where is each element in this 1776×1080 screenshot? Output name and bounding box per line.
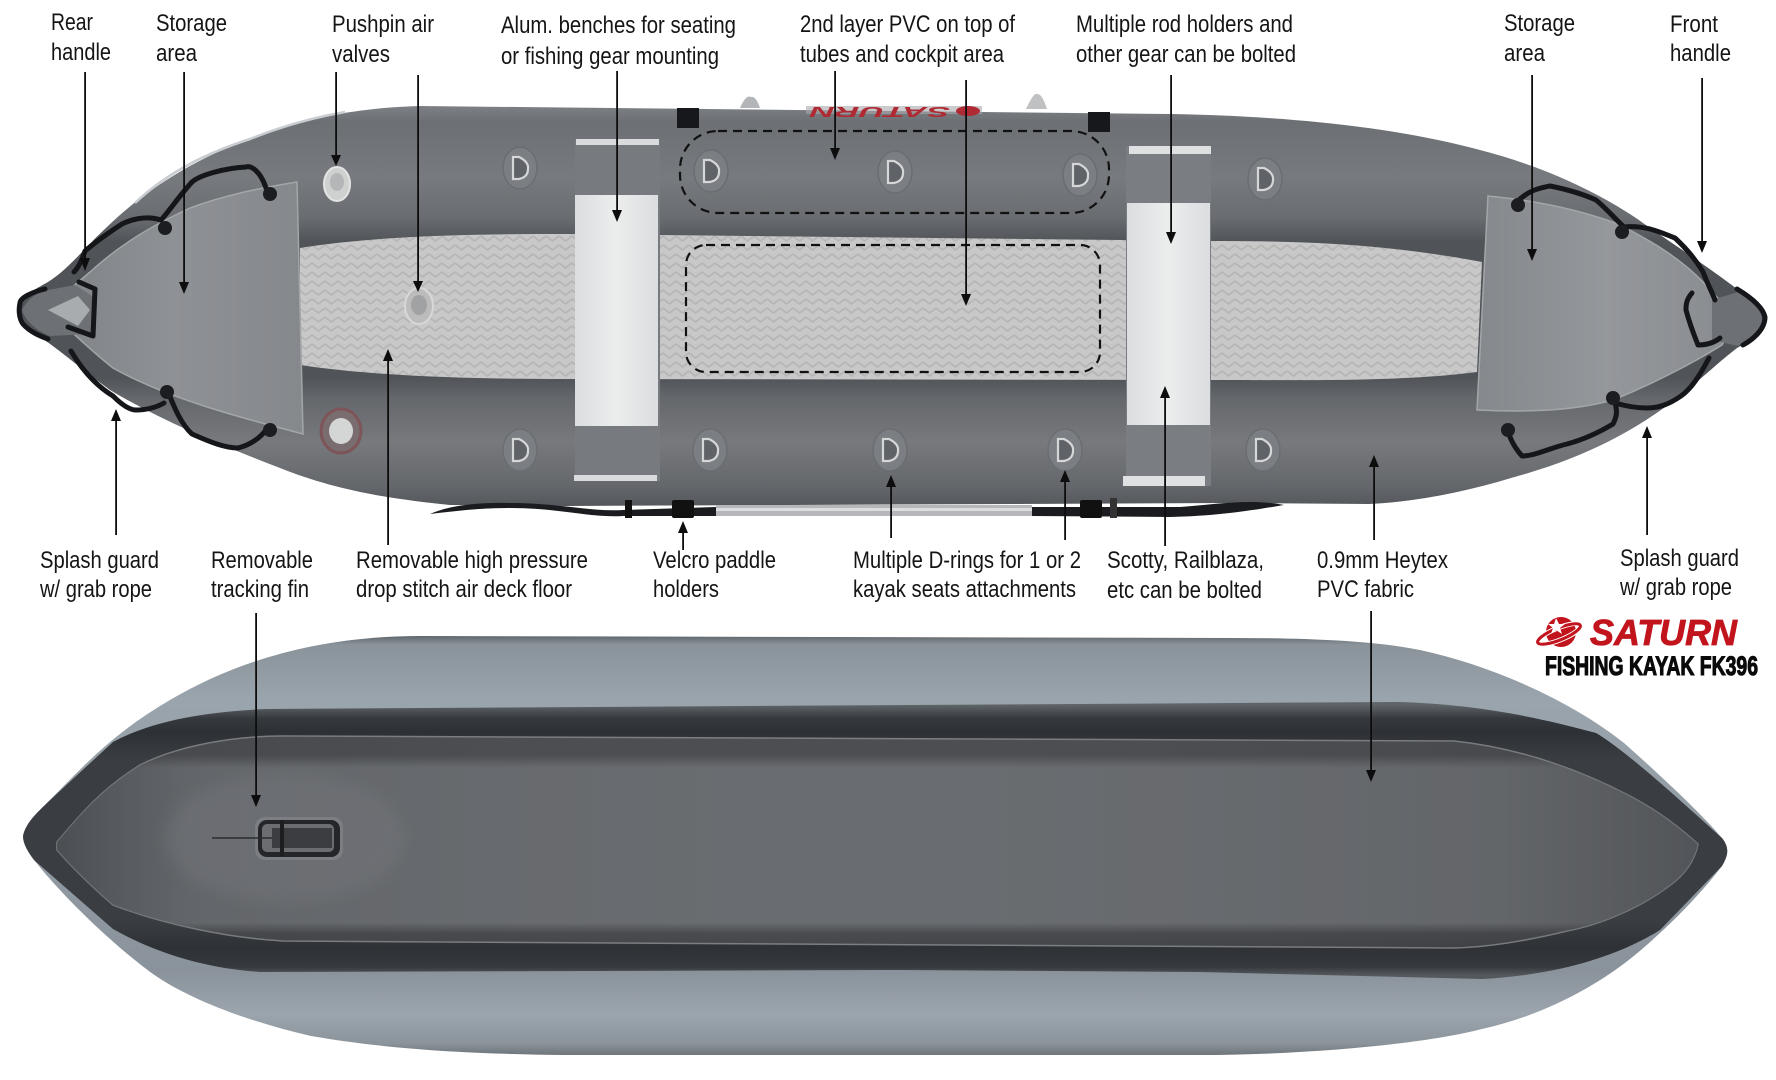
label: tracking fin: Removable bbox=[211, 547, 313, 574]
arrow: aluminum bench bbox=[612, 71, 622, 222]
label: splash guard right: Splash guard bbox=[1620, 545, 1739, 572]
arrow: front handle bbox=[1697, 78, 1707, 253]
label: storage area rear: Storage bbox=[156, 10, 227, 37]
air deck floor bbox=[300, 234, 1482, 380]
label: 2nd layer PVC bbox=[800, 11, 1015, 68]
pushpin valve lower bbox=[321, 409, 361, 453]
label: front handle: handle bbox=[1670, 40, 1731, 67]
label: pushpin air valves: valves bbox=[332, 41, 390, 68]
label: splash guard left bbox=[39, 547, 159, 603]
arrow: rear handle bbox=[80, 72, 90, 271]
arrow: rod holders bench bbox=[1166, 75, 1176, 244]
logo: Saturn fishing kayak bbox=[1534, 612, 1758, 681]
label: scotty railblaza: etc can be bolted bbox=[1107, 577, 1262, 604]
hull outline bottom view bbox=[23, 636, 1727, 1055]
label: rod holders: Multiple rod holders and bbox=[1076, 11, 1293, 38]
label: splash guard left: w/ grab rope bbox=[39, 576, 152, 603]
arrow: heytex hull bbox=[1366, 611, 1376, 782]
paddle on velcro holders bbox=[430, 498, 1284, 518]
label: pushpin air valves: Pushpin air bbox=[332, 11, 434, 38]
tip fold rear inner bbox=[48, 296, 90, 326]
label: pushpin air valves bbox=[332, 11, 434, 68]
label: aluminum benches: Alum. benches for seating bbox=[501, 12, 736, 39]
arrow: 2nd layer tube bbox=[830, 71, 840, 160]
label: storage area rear: area bbox=[156, 40, 198, 67]
label: D-rings bbox=[853, 547, 1081, 603]
label: rear handle: handle bbox=[51, 39, 111, 66]
label: velcro paddle holders bbox=[653, 547, 776, 603]
label: rod holders bbox=[1076, 11, 1296, 68]
ropes and handles bbox=[19, 167, 1765, 456]
label: splash guard right bbox=[1619, 545, 1739, 601]
label: aluminum benches: or fishing gear mounting bbox=[501, 43, 719, 70]
arrow: D-ring right bbox=[1060, 470, 1070, 540]
label: heytex PVC fabric: PVC fabric bbox=[1317, 576, 1414, 603]
label: front handle bbox=[1670, 11, 1731, 67]
kayak top view bbox=[18, 94, 1766, 518]
tracking fin mount bbox=[212, 817, 343, 860]
label: storage area front bbox=[1504, 10, 1575, 67]
arrows bbox=[80, 71, 1707, 807]
arrow: pushpin valve floor bbox=[413, 75, 423, 292]
label: scotty railblaza: Scotty, Railblaza, bbox=[1107, 547, 1264, 574]
bench rear bbox=[574, 139, 660, 481]
top edge fittings bbox=[677, 94, 1110, 132]
arrow: pushpin valve upper bbox=[331, 72, 341, 166]
center panel end shading bbox=[57, 736, 1698, 948]
label: velcro paddle holders: holders bbox=[653, 576, 719, 603]
label: D-rings: Multiple D-rings for 1 or 2 bbox=[853, 547, 1081, 574]
center bottom panel bbox=[57, 736, 1698, 948]
hull rim highlight bbox=[135, 112, 345, 203]
label: storage area rear bbox=[156, 10, 227, 67]
label: rear handle bbox=[51, 9, 111, 66]
rope grommets bbox=[158, 187, 1629, 437]
storage area front bbox=[1477, 196, 1737, 411]
2nd layer PVC dashed regions bbox=[680, 131, 1109, 372]
label: D-rings: kayak seats attachments bbox=[853, 576, 1076, 603]
arrow: 2nd layer cockpit bbox=[961, 80, 971, 306]
kayak bottom view bbox=[23, 636, 1727, 1055]
arrow: storage area rear bbox=[179, 72, 189, 294]
label: velcro paddle holders: Velcro paddle bbox=[653, 547, 776, 574]
label: tracking fin: tracking fin bbox=[211, 576, 309, 603]
labels bbox=[39, 9, 1739, 604]
label: air deck floor: drop stitch air deck floor bbox=[356, 576, 572, 603]
label: rod holders: other gear can be bolted bbox=[1076, 41, 1296, 68]
label: air deck floor: Removable high pressure bbox=[356, 547, 588, 574]
arrow: air deck floor bbox=[383, 349, 393, 545]
label: tracking fin bbox=[211, 547, 313, 603]
label: air deck floor bbox=[356, 547, 588, 603]
icon: planet bbox=[1534, 617, 1584, 649]
arrow: tracking fin bbox=[251, 613, 261, 807]
pushpin valve upper bbox=[324, 167, 350, 201]
label: splash guard right: w/ grab rope bbox=[1619, 574, 1732, 601]
arrow: velcro holder bbox=[678, 521, 688, 550]
label: aluminum benches bbox=[501, 12, 736, 70]
label: splash guard left: Splash guard bbox=[40, 547, 159, 574]
arrow: heytex tube bbox=[1369, 455, 1379, 540]
pushpin valve floor bbox=[405, 288, 433, 324]
red SATURN lettering on tube: SATURN bbox=[807, 103, 950, 120]
dark keel band bbox=[23, 702, 1727, 979]
label: storage area front: Storage bbox=[1504, 10, 1575, 37]
tip fold front bbox=[1712, 292, 1762, 346]
arrow: splash guard left bbox=[111, 409, 121, 535]
label: 2nd layer PVC: tubes and cockpit area bbox=[800, 41, 1005, 68]
fin mount halo bbox=[165, 773, 405, 903]
label: scotty railblaza bbox=[1107, 547, 1264, 604]
label: rear handle: Rear bbox=[51, 9, 93, 36]
label: front handle: Front bbox=[1670, 11, 1718, 38]
logo wordmark: SATURN bbox=[1590, 612, 1738, 653]
arrow: storage area front bbox=[1527, 75, 1537, 261]
D-rings bbox=[503, 147, 1282, 471]
hull outline top view bbox=[18, 106, 1766, 506]
arrow: scotty bench bbox=[1160, 386, 1170, 546]
bench front bbox=[1123, 146, 1211, 486]
arrow: splash guard right bbox=[1642, 426, 1652, 535]
tip fold rear bbox=[22, 285, 92, 336]
storage area rear bbox=[50, 182, 303, 434]
label: 2nd layer PVC: 2nd layer PVC on top of bbox=[800, 11, 1015, 38]
red SATURN lettering on tube bbox=[806, 103, 982, 120]
label: storage area front: area bbox=[1504, 40, 1546, 67]
arrow: D-ring center bbox=[886, 475, 896, 538]
label: heytex PVC fabric bbox=[1317, 547, 1448, 603]
label: heytex PVC fabric: 0.9mm Heytex bbox=[1317, 547, 1448, 574]
